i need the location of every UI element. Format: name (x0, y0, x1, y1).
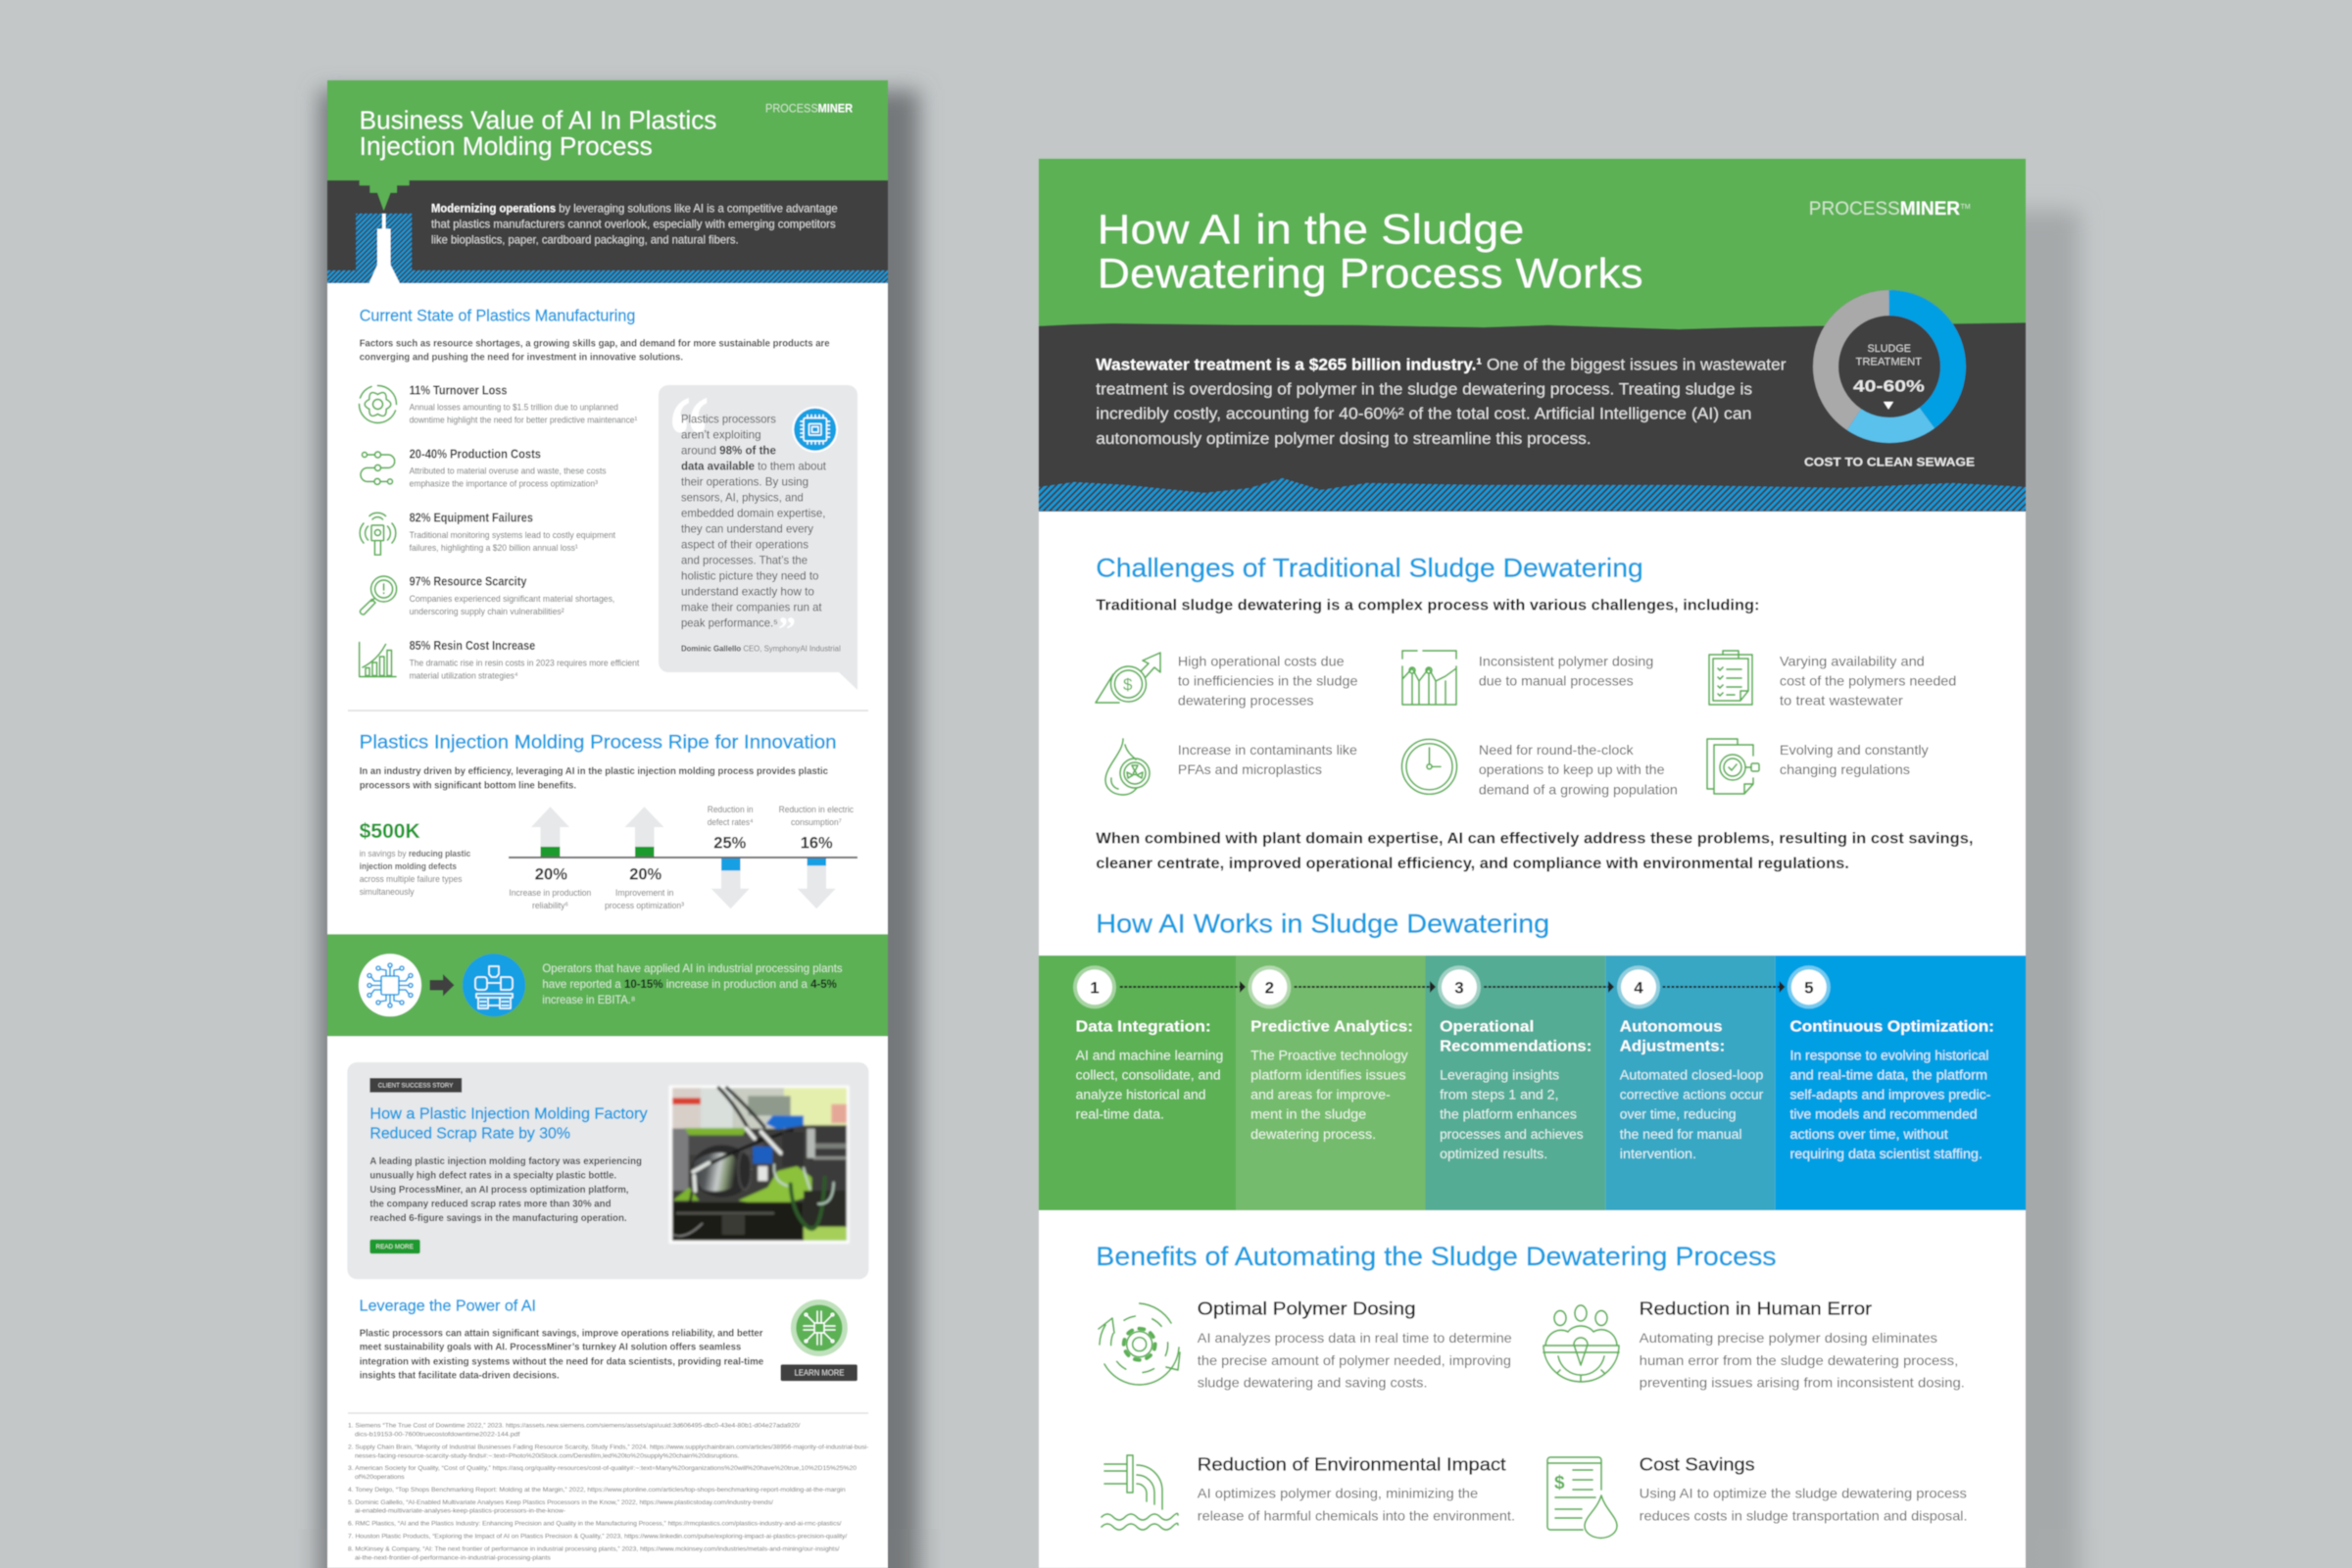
case study text: reached 6-figure savings in the manufacturing operation. (369, 1213, 627, 1224)
stat: resin cost: material utilization strategies⁴ (410, 669, 518, 680)
case study text: Using ProcessMiner, an AI process optimization platform, (369, 1185, 629, 1196)
arrow: process optimization up 20%: 20% (629, 864, 662, 883)
arrow: electric consumption down 16%: Reduction in electric (779, 804, 854, 814)
intro text: Modernizing operations by leveraging solutions like AI is a competitive advantage (431, 203, 838, 216)
arrow: production reliability up 20%: Increase in production (509, 887, 591, 898)
challenge: polymer availability (1709, 651, 1956, 709)
step 4: autonomous adjustments (1605, 956, 1775, 1210)
intro text: autonomously optimize polymer dosing to streamline this process. (1096, 429, 1592, 448)
icon: bar chart (360, 643, 396, 676)
challenges conclusion: When combined with plant domain expertise, AI can effectively address these problems, resulting in cost savings, (1096, 831, 1974, 848)
dark intro band (1039, 290, 2026, 512)
stat: resin cost: 85% Resin Cost Increase (410, 639, 535, 653)
read more button (369, 1240, 420, 1253)
arrow: defect rates down 25% (708, 804, 753, 908)
stat: turnover loss: Annual losses amounting to $1.5 trillion due to unplanned (410, 401, 618, 412)
stat: production costs: emphasize the importance of process optimization³ (410, 478, 598, 489)
stat: $500K savings: across multiple failure types (360, 873, 463, 884)
step 2: predictive analytics: ment in the sludge (1250, 1107, 1366, 1122)
references: ai-the-next-frontier-of-performance-in-industrial-processing-plants (355, 1555, 551, 1562)
heading: how AI works: How AI Works in Sludge Dewatering (1096, 909, 1549, 939)
quote text (681, 413, 827, 629)
step number: 3 (1454, 978, 1464, 998)
icon: molding machine (463, 954, 525, 1016)
step 3: operational recommendations: Leveraging insights (1440, 1067, 1559, 1082)
step 3: operational recommendations: Recommendations: (1440, 1039, 1592, 1055)
challenge: regulations (1707, 739, 1929, 794)
intro text: that plastics manufacturers cannot overlook, especially with emerging competitors (431, 219, 836, 231)
step 1: data integration: real-time data. (1076, 1107, 1164, 1122)
heading: benefits: Benefits of Automating the Sludge Dewatering Process (1096, 1242, 1777, 1271)
icon: clipboard (1709, 651, 1752, 705)
arrow: defect rates down 25%: 25% (713, 833, 746, 852)
references: 5. Dominic Gallello, “AI-Enabled Multivariate Analyses Keep Plastics Processors in the Know,” 2022, https://www.plasticstoday.com/industry-trends/ (348, 1499, 773, 1506)
challenge: operational costs: dewatering processes (1178, 693, 1313, 709)
arrow: production reliability up 20%: reliability⁶ (532, 900, 568, 910)
benefit: cost savings: Cost Savings (1640, 1454, 1755, 1474)
quote text: aren’t exploiting (681, 428, 761, 441)
tag: CLIENT SUCCESS STORY (378, 1083, 454, 1090)
step 4: autonomous adjustments: intervention. (1620, 1147, 1696, 1161)
chart: donut cost to clean sewage: TREATMENT (1856, 357, 1922, 368)
arrow: electric consumption down 16% (779, 804, 854, 908)
logo: PROCESSMINER (1809, 199, 1960, 220)
quote text: make their companies run at (681, 601, 822, 613)
step 4: autonomous adjustments: over time, reducing (1620, 1107, 1737, 1122)
benefit: optimal polymer dosing (1099, 1299, 1512, 1391)
quote text: data available to them about (681, 460, 827, 472)
chart: donut cost to clean sewage: 40-60% (1853, 376, 1925, 395)
closing quote mark: ” (778, 610, 796, 649)
intro text (431, 203, 838, 247)
benefit: optimal polymer dosing: the precise amount of polymer needed, improving (1198, 1352, 1511, 1368)
benefit: environmental impact (1102, 1454, 1515, 1530)
chart: donut cost to clean sewage: SLUDGE (1868, 343, 1911, 355)
opening quote mark: “ (668, 372, 710, 500)
leverage text: insights that facilitate data-driven decisions. (360, 1371, 560, 1382)
quote text: and processes. That’s the (681, 554, 808, 566)
quote text: their operations. By using (681, 475, 808, 488)
quote text: they can understand every (681, 522, 813, 535)
title: Injection Molding Process (360, 133, 653, 161)
icon: gear ring (359, 386, 396, 423)
references: dics-b19153-00-7600truecostofdowntime2022-144.pdf (355, 1432, 520, 1439)
challenge: operational costs: High operational costs due (1178, 653, 1345, 668)
benefit: optimal polymer dosing: AI analyzes process data in real time to determine (1198, 1330, 1512, 1346)
callout: quote (659, 372, 858, 690)
step 2: predictive analytics: and areas for improve- (1250, 1088, 1391, 1102)
benefit: optimal polymer dosing: Optimal Polymer Dosing (1198, 1299, 1416, 1319)
photo: injection molding machine (669, 1086, 850, 1244)
quote attribution: Dominic Gallello CEO, SymphonyAI Industrial (681, 644, 841, 653)
heading: ripe for innovation: Plastics Injection Molding Process Ripe for Innovation (360, 732, 837, 753)
leverage text: Plastic processors can attain significant savings, improve operations reliability, and better (360, 1328, 763, 1339)
innovation intro (360, 766, 828, 792)
chart axis (509, 857, 858, 858)
references: of%20operations (355, 1474, 405, 1481)
title: How AI in the Sludge (1098, 206, 1524, 253)
intro text: Wastewater treatment is a $265 billion industry.¹ One of the biggest issues in wastewater (1096, 355, 1787, 373)
quote text: around 98% of the (681, 444, 776, 457)
icon: dosing chart (1402, 651, 1456, 705)
challenge: operational costs (1096, 653, 1358, 709)
stat: production costs (361, 447, 607, 489)
case study title: Reduced Scrap Rate by 30% (369, 1126, 570, 1143)
quote text: embedded domain expertise, (681, 507, 825, 519)
icon: contaminated drop (1105, 739, 1150, 795)
case study text (369, 1156, 642, 1224)
learn more button (780, 1364, 858, 1381)
icon: magnifier (360, 576, 397, 614)
step 4: autonomous adjustments: Adjustments: (1620, 1039, 1725, 1055)
arrow: electric consumption down 16%: consumption⁷ (791, 816, 842, 827)
callout text: Operators that have applied AI in industrial processing plants (542, 962, 843, 975)
panel: plastics injection molding infographic (327, 80, 888, 1568)
challenges conclusion (1096, 831, 1974, 872)
step 3: operational recommendations: optimized results. (1440, 1147, 1547, 1161)
references: 4. Toney Delgo, “Top Shops Benchmarking Report: Molding at the Margin,” 2022, https://www.ptonline.com/articles/top-shops-benchmarking-report-molding-at-the-margin (348, 1487, 846, 1494)
logo trademark: TM (1960, 204, 1971, 211)
icon: process flow (361, 452, 395, 484)
arrow: process optimization up 20%: process optimization³ (605, 900, 684, 910)
references: 6. RMC Plastics, “AI and the Plastics Industry: Enhancing Precision and Quality in the Manufacturing Process,” https://rmcplastics.com/plastics-industry-and-ai-rmc-plastics/ (348, 1521, 842, 1528)
stat: resin cost: The dramatic rise in resin costs in 2023 requires more efficient (410, 657, 640, 667)
challenge: operational costs: to inefficiencies in the sludge (1178, 673, 1358, 689)
process steps band (1039, 956, 2026, 1210)
read more button: READ MORE (376, 1245, 414, 1250)
leverage text (360, 1328, 764, 1382)
current state intro (360, 338, 830, 364)
icon: people and gauge (1544, 1305, 1619, 1382)
stat: equipment failures: failures, highlighting a $20 billion annual loss¹ (410, 542, 578, 553)
stat: resource scarcity (360, 575, 614, 616)
challenge: round the clock: operations to keep up with the (1479, 761, 1665, 777)
benefit: reduction in human error: preventing issues arising from inconsistent dosing. (1640, 1375, 1965, 1391)
arrow: process optimization up 20%: Improvement in (615, 887, 673, 898)
arrows: dotted step connectors (1120, 981, 1786, 993)
benefit: environmental impact: release of harmful chemicals into the environment. (1198, 1507, 1515, 1523)
step number (1248, 965, 1291, 1008)
intro text (1096, 355, 1787, 448)
case study title (369, 1106, 648, 1143)
icon: wireless sensor (360, 513, 396, 555)
leverage text: meet sustainability goals with AI. ProcessMiner’s turnkey AI solution offers seamless (360, 1343, 742, 1353)
step 5: continuous optimization: self-adapts and improves predic- (1789, 1088, 1990, 1102)
challenge: regulations: Evolving and constantly (1780, 742, 1929, 758)
icon: AI badge (791, 1299, 848, 1356)
stat: $500K savings: simultaneously (360, 886, 415, 897)
step 3: operational recommendations: processes and achieves (1440, 1127, 1584, 1142)
step 1: data integration (1039, 956, 1236, 1210)
intro text: treatment is overdosing of polymer in the sludge dewatering process. Treating sludge is (1096, 380, 1752, 399)
step 5: continuous optimization: actions over time, without (1789, 1127, 1948, 1142)
step 2: predictive analytics (1236, 956, 1425, 1210)
step 5: continuous optimization: tive models and recommended (1789, 1107, 1978, 1122)
challenge: polymer dosing (1402, 651, 1653, 705)
stat: resource scarcity: 97% Resource Scarcity (410, 575, 526, 589)
icon: chip badge (792, 407, 838, 453)
benefit: environmental impact: Reduction of Environmental Impact (1198, 1454, 1506, 1474)
stat: production costs: 20-40% Production Costs (410, 447, 541, 461)
step number (1788, 965, 1831, 1008)
panel: client success story (347, 1062, 868, 1279)
chart: donut cost to clean sewage (1813, 290, 1966, 443)
stat: $500K savings: in savings by reducing plastic (360, 848, 470, 858)
icon: outfall pipe (1102, 1455, 1178, 1530)
step 3: operational recommendations: from steps 1 and 2, (1440, 1088, 1558, 1102)
nozzle graphic (356, 180, 412, 283)
step number: 4 (1634, 978, 1643, 998)
case study title: How a Plastic Injection Molding Factory (369, 1106, 648, 1123)
stat: equipment failures: Traditional monitoring systems lead to costly equipment (410, 529, 615, 540)
challenge: contaminants: Increase in contaminants like (1178, 742, 1357, 758)
challenges conclusion: cleaner centrate, improved operational efficiency, and compliance with environmental regulations. (1096, 856, 1849, 872)
stat: resource scarcity: underscoring supply chain vulnerabilities² (410, 606, 564, 616)
step 4: autonomous adjustments: Autonomous (1620, 1019, 1723, 1036)
step number: 2 (1265, 978, 1274, 998)
challenge: round the clock (1401, 739, 1678, 797)
challenge: polymer availability: to treat wastewater (1780, 693, 1903, 709)
stat: $500K savings: injection molding defects (360, 860, 457, 871)
logo: PROCESSMINER (765, 102, 853, 116)
chart: benefit arrows (509, 804, 858, 910)
heading: current state: Current State of Plastics Manufacturing (360, 307, 635, 324)
case study text: unusually high defect rates in a specialty plastic bottle. (369, 1170, 616, 1181)
callout text (542, 962, 843, 1006)
step 5: continuous optimization: In response to evolving historical (1789, 1048, 1988, 1062)
panel: sludge dewatering infographic (1039, 159, 2026, 1568)
step 5: continuous optimization (1775, 956, 2026, 1210)
dark intro band (327, 180, 888, 283)
step 2: predictive analytics: dewatering process. (1250, 1127, 1376, 1142)
step number (1617, 965, 1660, 1008)
icon: invoice and drop: $ (1554, 1473, 1565, 1494)
stat: $500K savings: $500K (360, 820, 420, 843)
step 1: data integration: analyze historical and (1076, 1088, 1205, 1102)
step 3: operational recommendations: Operational (1440, 1019, 1534, 1036)
innovation intro: processors with significant bottom line benefits. (360, 781, 576, 792)
header band (1039, 159, 2026, 345)
benefit: optimal polymer dosing: sludge dewatering and saving costs. (1198, 1375, 1427, 1391)
step 5: continuous optimization: and real-time data, the platform (1789, 1067, 1987, 1082)
quote text: sensors, AI, physics, and (681, 491, 804, 504)
step 4: autonomous adjustments: the need for manual (1620, 1127, 1742, 1142)
step number: 1 (1090, 978, 1100, 998)
step 1: data integration: AI and machine learning (1076, 1048, 1223, 1062)
title (1098, 206, 1643, 297)
challenge: polymer availability: cost of the polymers needed (1780, 673, 1956, 689)
step 5: continuous optimization: requiring data scientist staffing. (1789, 1147, 1983, 1161)
heading: challenges: Challenges of Traditional Sludge Dewatering (1096, 553, 1643, 582)
step 2: predictive analytics: Predictive Analytics: (1250, 1019, 1413, 1036)
tag (369, 1078, 462, 1093)
benefit: reduction in human error: human error from the sludge dewatering process, (1640, 1352, 1958, 1368)
challenge: contaminants (1105, 739, 1357, 795)
references (348, 1423, 868, 1562)
quote text: Plastics processors (681, 413, 776, 425)
arrow: electric consumption down 16%: 16% (801, 833, 833, 852)
references: nesses-facing-resource-scarcity-study-finds#:~:text=Photo%20iStock.com/Denisfilm,led%20to%20supply%20chain%20disruptions. (355, 1452, 740, 1459)
stat: $500K savings (360, 820, 470, 897)
step 4: autonomous adjustments: Automated closed-loop (1620, 1067, 1763, 1082)
references: 7. Houston Plastic Products, “Exploring the Impact of AI on Plastics Precision & Quality,” 2023, https://www.linkedin.com/pulse/exploring-impact-ai-plastics-precision-quality/ (348, 1534, 847, 1541)
current state intro: Factors such as resource shortages, a growing skills gap, and demand for more sustainable products are (360, 338, 830, 349)
quote text: understand exactly how to (681, 585, 814, 598)
quote text: peak performance.⁵ (681, 616, 778, 629)
heading: leverage the power of AI: Leverage the Power of AI (360, 1298, 536, 1314)
current state intro: converging and pushing the need for investment in innovative solutions. (360, 353, 683, 364)
benefit: environmental impact: AI optimizes polymer dosing, minimizing the (1198, 1486, 1478, 1501)
case study text: A leading plastic injection molding factory was experiencing (369, 1156, 642, 1167)
challenge: polymer dosing: due to manual processes (1479, 673, 1634, 689)
challenge: polymer availability: Varying availability and (1780, 653, 1925, 668)
benefit: cost savings (1547, 1454, 1968, 1538)
stat: turnover loss: downtime highlight the need for better predictive maintenance¹ (410, 415, 637, 425)
arrow: process optimization up 20% (605, 807, 684, 910)
header band (327, 80, 888, 180)
intro text: like bioplastics, paper, cardboard packaging, and natural fibers. (431, 234, 739, 247)
challenge: regulations: changing regulations (1780, 761, 1910, 777)
challenge: round the clock: Need for round-the-clock (1479, 742, 1635, 758)
right panel drop shadow (1078, 210, 2103, 1568)
divider (348, 710, 868, 711)
arrow: production reliability up 20%: 20% (535, 864, 567, 883)
step 2: predictive analytics: platform identifies issues (1250, 1067, 1406, 1082)
stat: resin cost (360, 639, 640, 680)
step number (1073, 965, 1116, 1008)
challenge: contaminants: PFAs and microplastics (1178, 761, 1322, 777)
references: 8. McKinsey & Company, “AI: The next frontier of performance in industrial processing plants,” 2023, https://www.mckinsey.com/industries/metals-and-mining/our-insights/ (348, 1546, 840, 1553)
stat: resource scarcity: Companies experienced significant material shortages, (410, 593, 614, 604)
benefit: reduction in human error: Reduction in Human Error (1640, 1299, 1872, 1319)
innovation intro: In an industry driven by efficiency, leveraging AI in the plastic injection molding process provides plastic (360, 766, 828, 777)
benefit: cost savings: reduces costs in sludge transportation and disposal. (1640, 1507, 1968, 1523)
challenge: polymer dosing: Inconsistent polymer dosing (1479, 653, 1653, 668)
icon: regulation document (1707, 739, 1759, 794)
quote text: holistic picture they need to (681, 569, 819, 582)
callout text: increase in EBITA.⁸ (542, 994, 635, 1006)
stat: turnover loss: 11% Turnover Loss (410, 383, 508, 397)
icon: rising cost (1096, 653, 1160, 703)
learn more button: LEARN MORE (795, 1368, 845, 1377)
left panel drop shadow (296, 90, 943, 1568)
stat: equipment failures (360, 512, 615, 555)
stat: production costs: Attributed to material overuse and waste, these costs (410, 466, 607, 476)
challenges intro: Traditional sludge dewatering is a complex process with various challenges, including: (1096, 597, 1759, 613)
step 1: data integration: Data Integration: (1076, 1019, 1211, 1036)
arrow: production reliability up 20% (509, 807, 591, 910)
challenge: round the clock: demand of a growing population (1479, 781, 1678, 797)
arrow: to machine (430, 974, 455, 996)
icon: rising cost: $ (1123, 675, 1133, 694)
references: 3. American Society for Quality, “Cost of Quality,” https://asq.org/quality-resources/cost-of-quality#:~:text=Many%20organizations%20will%20have%20true,10%2D15%25%20 (348, 1465, 858, 1472)
references: 1. Siemens “The True Cost of Downtime 2022,” 2023. https://assets.new.siemens.com/siemens/assets/api/uuid:3d606495-dbc0-43e4-80b1-d04e27ada920/ (348, 1423, 801, 1430)
stat: equipment failures: 82% Equipment Failures (410, 512, 533, 525)
icon: clock (1401, 739, 1456, 794)
step number (1438, 965, 1481, 1008)
references: ai-enabled-multivariate-analyses-keep-plastics-processors-in-the-know- (355, 1508, 565, 1515)
benefit: reduction in human error (1544, 1299, 1965, 1391)
title (360, 108, 716, 161)
step number: 5 (1804, 978, 1814, 998)
title: Business Value of AI In Plastics (360, 108, 716, 135)
leverage text: integration with existing systems without the need for data scientists, providing real-time (360, 1356, 764, 1367)
icon: AI chip (359, 954, 421, 1016)
step 3: operational recommendations: the platform enhances (1440, 1107, 1577, 1122)
step 4: autonomous adjustments: corrective actions occur (1620, 1088, 1764, 1102)
case study text: the company reduced scrap rates more than 30% and (369, 1199, 612, 1209)
icon: invoice and drop (1547, 1457, 1617, 1538)
donut caption: COST TO CLEAN SEWAGE (1804, 456, 1975, 469)
stat: turnover loss (359, 383, 637, 425)
divider (348, 1412, 868, 1414)
callout text: have reported a 10-15% increase in production and a 4-5% (542, 978, 837, 991)
step 3: operational recommendations (1425, 956, 1605, 1210)
step 5: continuous optimization: Continuous Optimization: (1789, 1019, 1994, 1036)
quote text: aspect of their operations (681, 538, 808, 551)
benefit: reduction in human error: Automating precise polymer dosing eliminates (1640, 1330, 1937, 1346)
step 1: data integration: collect, consolidate, and (1076, 1067, 1221, 1082)
step 2: predictive analytics: The Proactive technology (1250, 1048, 1408, 1062)
icon: gear cycle (1099, 1303, 1180, 1385)
title: Dewatering Process Works (1098, 250, 1643, 297)
arrow: defect rates down 25%: defect rates⁴ (708, 816, 753, 827)
arrow: defect rates down 25%: Reduction in (708, 804, 753, 814)
benefit: cost savings: Using AI to optimize the sludge dewatering process (1640, 1486, 1967, 1501)
callout band: operators results (327, 934, 888, 1036)
references: 2. Supply Chain Brain, “Majority of Industrial Businesses Fading Resource Scarcity, Study Finds,” 2024. https://www.supplychainbrain.com/articles/38956-majority-of-industrial-busi- (348, 1444, 868, 1450)
intro text: incredibly costly, accounting for 40-60%² of the total cost. Artificial Intelligence (AI) can (1096, 405, 1751, 423)
